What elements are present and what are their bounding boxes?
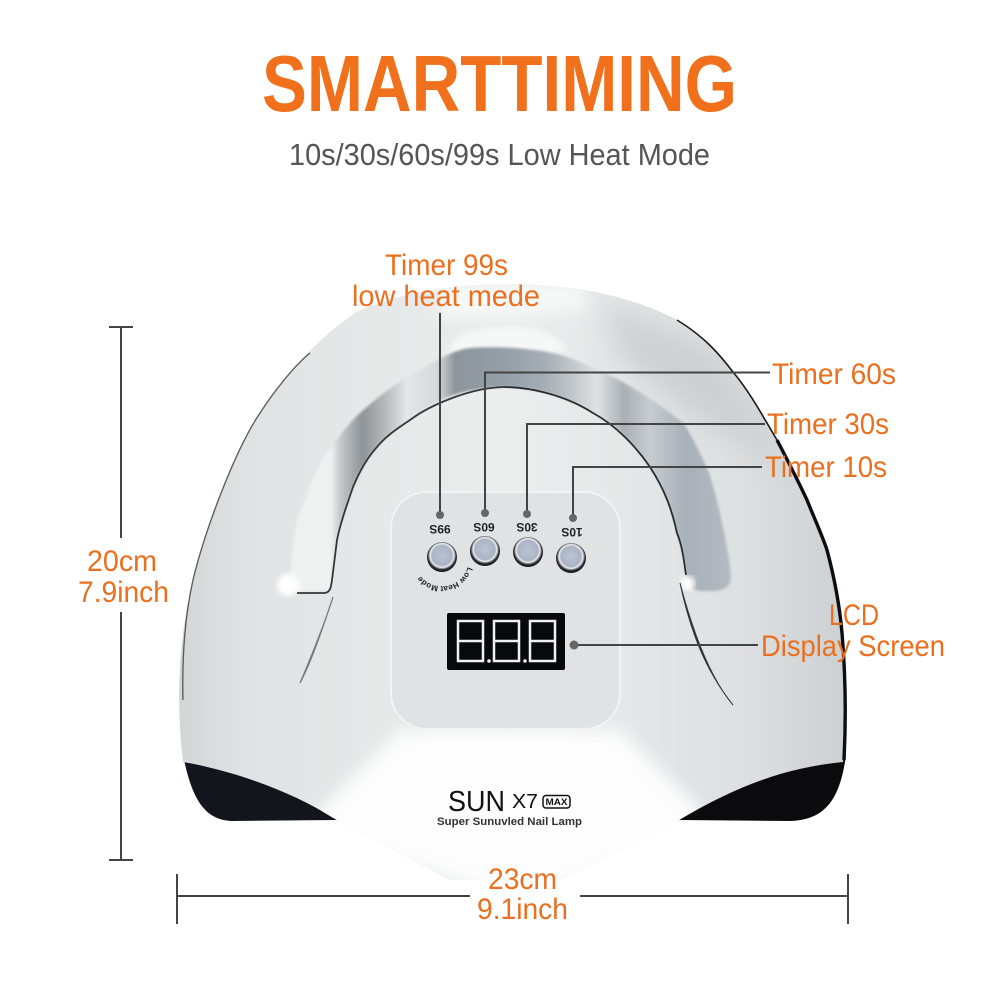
right handle glint — [681, 576, 695, 590]
label: low heat mode: low heat mede — [352, 280, 540, 313]
button 60s: 60S — [473, 520, 495, 534]
silver handle arc — [290, 347, 731, 592]
subtitle: 10s/30s/60s/99s Low Heat Mode — [289, 137, 710, 172]
nail lamp illustration — [179, 284, 847, 880]
model name: X7 — [512, 791, 538, 813]
label: timer 60s: Timer 60s — [772, 358, 896, 391]
handle inner edge line right — [503, 387, 686, 575]
button 10s: 10S — [561, 525, 583, 539]
control panel — [391, 492, 620, 729]
right black rim — [677, 320, 777, 440]
width dimension line — [177, 874, 848, 924]
width value inch: 9.1inch — [477, 893, 568, 926]
handle inner edge line left — [297, 387, 503, 593]
label: timer 10s: Timer 10s — [765, 451, 887, 484]
label: LCD: LCD — [829, 599, 879, 632]
leader line: timer 30s — [523, 424, 765, 518]
width value cm: 23cm — [488, 863, 557, 896]
label: display screen: Display Screen — [761, 630, 945, 663]
button 99s — [427, 522, 457, 572]
body crease right — [680, 583, 733, 705]
lamp body — [179, 284, 845, 880]
label: timer 30s: Timer 30s — [767, 408, 889, 441]
low heat mode arc label: Low Heat Mode — [418, 567, 473, 592]
max badge: MAX — [546, 797, 568, 807]
leader line: timer 60s — [481, 372, 770, 517]
body crease left — [300, 597, 333, 683]
leader line: timer 99s — [436, 313, 444, 519]
brand name: SUN — [448, 786, 505, 818]
left foot — [183, 755, 337, 821]
height dimension line — [109, 327, 133, 860]
right foot — [679, 755, 846, 821]
height value cm: 20cm — [87, 545, 157, 578]
right black rim lower — [777, 440, 845, 760]
label: timer 99s: Timer 99s — [385, 249, 508, 282]
product tagline: Super Sunuvled Nail Lamp — [437, 816, 582, 828]
button 99s: 99S — [429, 522, 451, 536]
button 30s: 30S — [516, 520, 538, 534]
button 60s — [470, 520, 500, 566]
handle top bump — [447, 327, 567, 352]
height value inch: 7.9inch — [78, 576, 169, 609]
left dark rim — [183, 353, 310, 700]
leader line: LCD — [570, 640, 758, 650]
LCD screen — [447, 613, 565, 670]
body shading — [300, 284, 790, 900]
button 30s — [513, 520, 543, 567]
left handle glint — [277, 574, 299, 596]
title: SMARTTIMING — [262, 39, 737, 128]
leader line: timer 10s — [569, 467, 762, 522]
max badge — [543, 796, 570, 808]
button 10s — [556, 525, 586, 573]
